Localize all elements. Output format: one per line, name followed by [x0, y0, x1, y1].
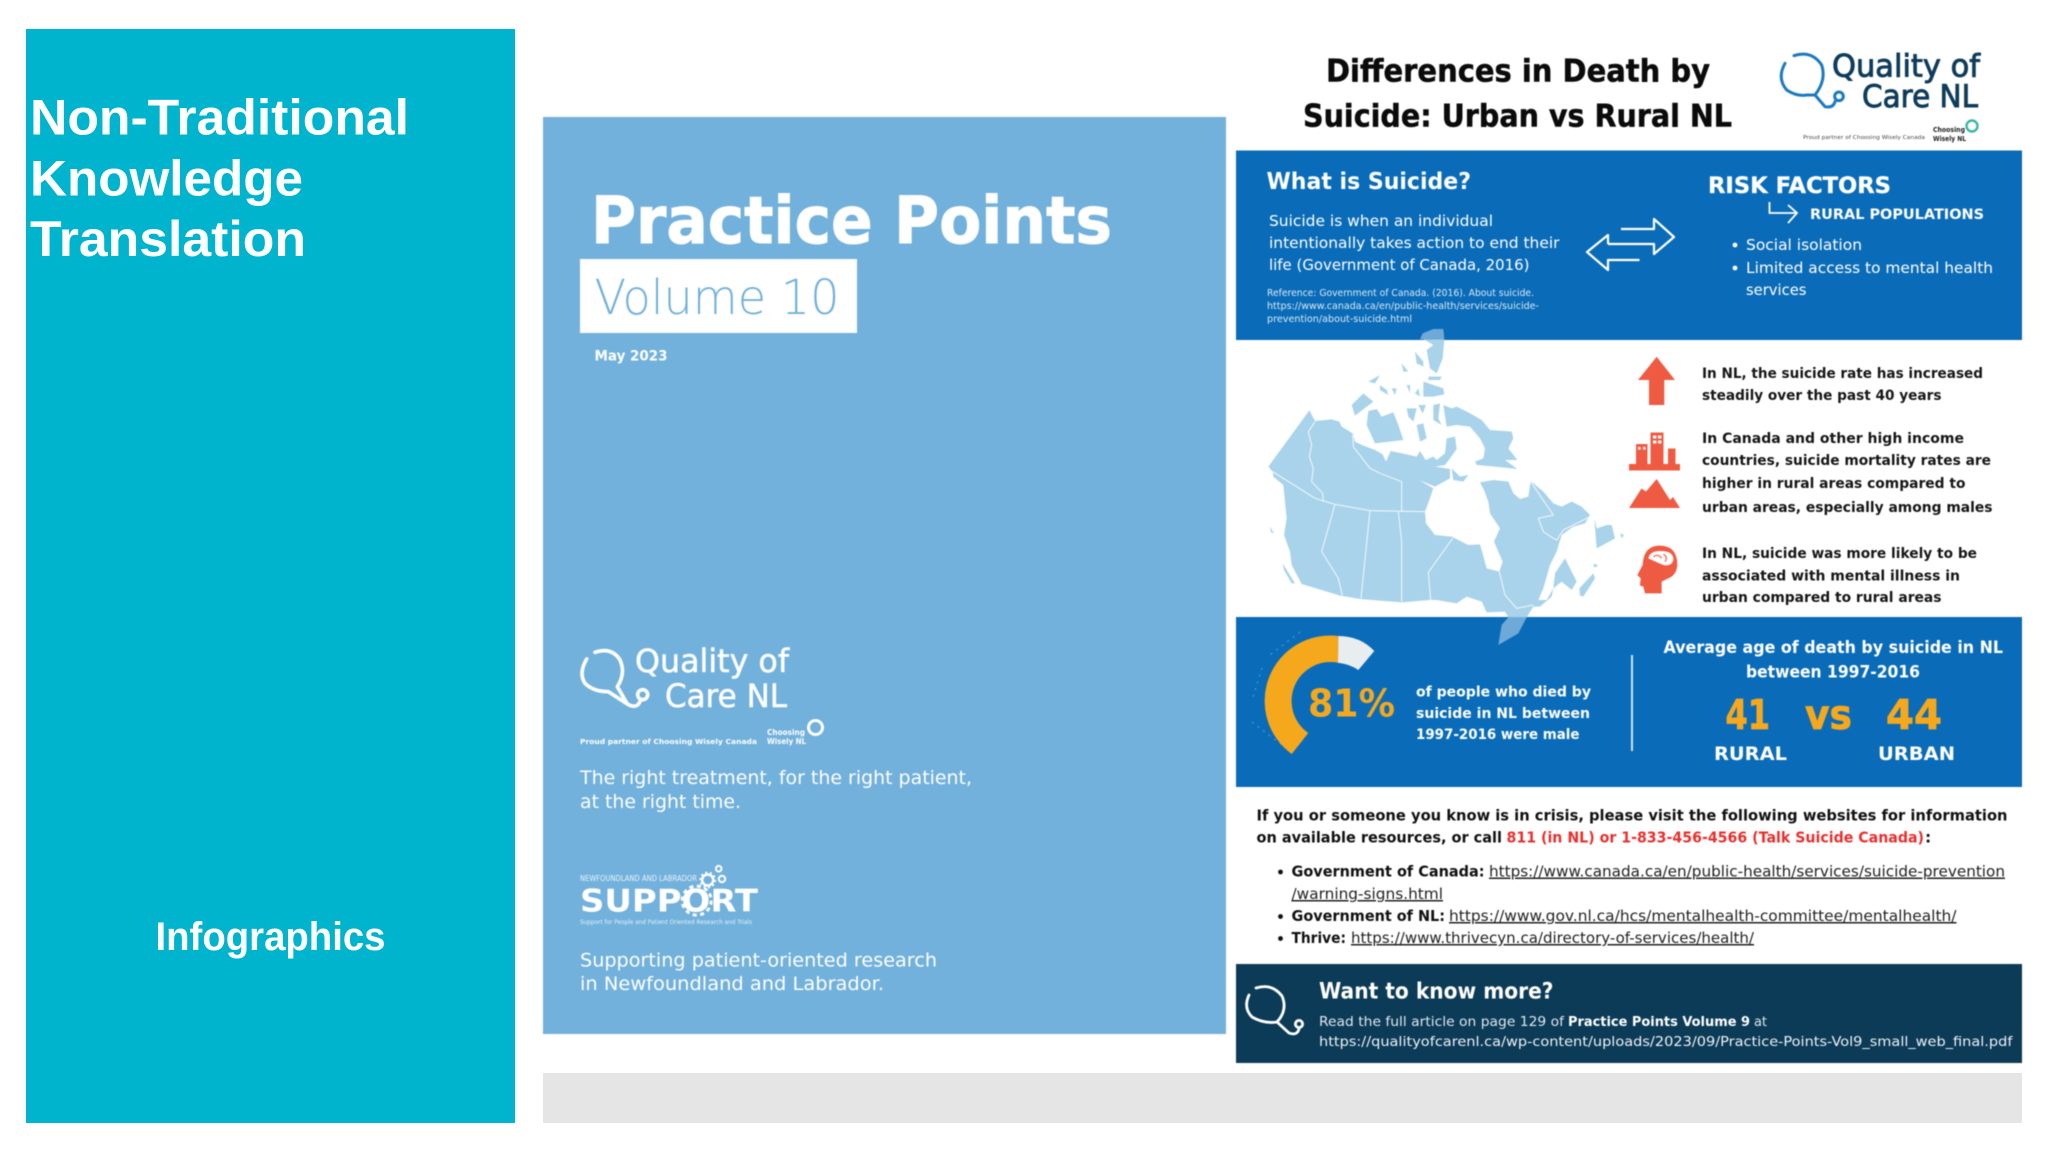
reference text: https://www.canada.ca/en/public-health/services/suicide-: [1267, 301, 1539, 312]
cover date: May 2023: [594, 348, 668, 364]
article reference: at: [1754, 1014, 1767, 1030]
heading: risk factors: RISK FACTORS: [1708, 174, 1891, 199]
sidebar label: Infographics: Infographics: [156, 915, 386, 959]
stat text: male share: [1416, 684, 1592, 743]
rural vs urban ages: [1714, 691, 1955, 765]
resource list: /warning-signs.html: [1292, 885, 1443, 903]
resource list: https://www.thrivecyn.ca/directory-of-services/health/: [1351, 929, 1755, 947]
infographic title: Suicide: Urban vs Rural NL: [1303, 98, 1732, 134]
rural vs urban ages: 44: [1886, 691, 1942, 739]
text: rate increased: In NL, the suicide rate has increased: [1702, 366, 1983, 382]
panel: Practice Points cover: [543, 117, 1226, 1034]
definition text: intentionally takes action to end their: [1269, 234, 1560, 252]
logo: NL SUPPORT: NEWFOUNDLAND AND LABRADOR: [580, 874, 697, 883]
panel: stats banner: [1236, 617, 2022, 787]
logo: Quality of Care NL white: [580, 642, 822, 746]
logo: Quality of Care NL white: Care NL: [665, 677, 787, 715]
article reference: Practice Points Volume 9: [1568, 1014, 1750, 1030]
crisis resources text: If you or someone you know is in crisis, please visit the following websites for information: [1256, 806, 2008, 824]
crisis resources text: 811 (in NL) or 1-833-456-4566 (Talk Suicide Canada): [1506, 828, 1924, 846]
stat text: male share: suicide in NL between: [1416, 706, 1590, 722]
tagline: right treatment: [579, 767, 972, 813]
stat text: male share: 1997-2016 were male: [1416, 727, 1580, 743]
article reference: https://qualityofcarenl.ca/wp-content/uploads/2023/09/Practice-Points-Vol9_small_web_final.pdf: [1319, 1034, 2014, 1050]
definition text: [1269, 212, 1560, 274]
text: mental illness: [1702, 546, 1977, 606]
logo: NL SUPPORT: Support for People and Patient Oriented Research and Trials: [580, 918, 753, 926]
logo: NL SUPPORT: SUPPORT: [580, 884, 758, 920]
text: rural mortality: countries, suicide mortality rates are: [1702, 453, 1991, 469]
resource list: Thrive:: [1292, 929, 1346, 947]
panel: section sidebar: [26, 29, 515, 1123]
logo: Quality of Care NL white: Quality of: [635, 642, 790, 680]
risk factor list: [1733, 236, 1993, 299]
heading: average age: Average age of death by suicide in NL: [1664, 638, 2003, 658]
reference text: prevention/about-suicide.html: [1267, 314, 1412, 325]
panel: suicide infographic: [1236, 30, 2022, 1063]
rural vs urban ages: 41: [1726, 691, 1770, 739]
icon: two-way arrows: [1587, 219, 1674, 270]
tagline: patient-oriented research: in Newfoundland and Labrador.: [580, 973, 884, 995]
panel: want to know more: [1236, 964, 2022, 1063]
crisis resources text: on available resources, or call: [1256, 828, 1502, 846]
donut chart: 81 percent: [1265, 635, 1395, 754]
logo: Quality of Care NL white: Proud partner of Choosing Wisely Canada: [580, 738, 757, 746]
resource list: https://www.gov.nl.ca/hcs/mentalhealth-committee/mentalhealth/: [1449, 907, 1957, 925]
resource list: Government of NL:: [1292, 907, 1445, 925]
infographic title: Differences in Death by: [1326, 54, 1710, 90]
rural vs urban ages: URBAN: [1878, 743, 1955, 765]
tagline: patient-oriented research: Supporting patient-oriented research: [580, 950, 937, 972]
donut chart: 81 percent: 81%: [1308, 682, 1395, 726]
definition text: Suicide is when an individual: [1269, 212, 1493, 230]
text: mental illness: In NL, suicide was more likely to be: [1702, 546, 1977, 562]
text: mental illness: urban compared to rural areas: [1702, 590, 1942, 606]
crisis resources text: :: [1925, 828, 1931, 846]
rural vs urban ages: RURAL: [1714, 743, 1787, 765]
rural vs urban ages: vs: [1805, 691, 1852, 739]
stat text: male share: of people who died by: [1416, 684, 1592, 700]
icon: up arrow: [1638, 357, 1675, 405]
subheading: rural populations: RURAL POPULATIONS: [1810, 207, 1984, 223]
logo: Quality of Care NL colour: Proud partner of Choosing Wisely Canada: [1803, 135, 1925, 141]
logo: Quality of Care NL colour: Choosing: [1933, 126, 1965, 134]
tagline: right treatment: The right treatment, for the right patient,: [579, 767, 972, 789]
text: rate increased: [1702, 366, 1983, 404]
heading: want to know more: Want to know more?: [1319, 980, 1554, 1004]
logo: Quality of Care NL colour: [1781, 48, 1981, 143]
volume badge: Volume 10: [594, 270, 840, 326]
sidebar title: Non-Traditional: [30, 90, 409, 146]
logo: Quality of Care NL white: Wisely NL: [767, 737, 806, 746]
resource list: Government of Canada:: [1292, 862, 1484, 880]
logo: Quality of Care NL colour: Wisely NL: [1933, 135, 1966, 143]
icon: stethoscope: [1247, 987, 1303, 1034]
text: rate increased: steadily over the past 40 years: [1702, 388, 1942, 404]
text: rural mortality: urban areas, especially among males: [1702, 500, 1992, 516]
text: mental illness: associated with mental illness in: [1702, 568, 1960, 584]
resource list: https://www.canada.ca/en/public-health/services/suicide-prevention: [1489, 862, 2005, 880]
icon: hook arrow: [1770, 202, 1797, 223]
tagline: patient-oriented research: [580, 950, 937, 995]
logo: NL SUPPORT: [580, 866, 758, 926]
map of Canada: [1268, 329, 1624, 645]
panel: what is suicide and risk factors: [1236, 150, 2022, 340]
icon: head with brain: [1637, 546, 1677, 593]
icon: city and mountain: [1629, 432, 1680, 508]
sidebar title: [30, 90, 409, 267]
grey footer bar: [543, 1073, 2022, 1123]
crisis resources text: [1256, 806, 2008, 947]
logo: Quality of Care NL colour: Quality of: [1832, 48, 1981, 84]
volume badge: [580, 259, 857, 333]
logo: Quality of Care NL colour: Care NL: [1862, 79, 1979, 115]
cover title: Practice Points: [591, 184, 1112, 259]
sidebar title: Knowledge: [30, 150, 303, 206]
logo: Quality of Care NL white: Choosing: [767, 728, 805, 737]
infographic title: [1303, 54, 1732, 134]
decorative gauge dots: [1252, 632, 1300, 745]
article reference: [1319, 1014, 2014, 1050]
heading: what is suicide: What is Suicide?: [1266, 169, 1471, 195]
text: rural mortality: In Canada and other high income: [1702, 431, 1964, 447]
reference text: [1267, 288, 1539, 325]
risk factor list: Limited access to mental health: [1746, 259, 1993, 277]
text: rural mortality: higher in rural areas compared to: [1702, 476, 1966, 492]
article reference: Read the full article on page 129 of: [1319, 1014, 1565, 1030]
heading: average age: between 1997-2016: [1746, 662, 1920, 682]
divider: [1631, 655, 1633, 751]
tagline: right treatment: at the right time.: [580, 791, 741, 813]
reference text: Reference: Government of Canada. (2016). About suicide.: [1267, 288, 1534, 299]
risk factor list: Social isolation: [1746, 236, 1862, 254]
definition text: life (Government of Canada, 2016): [1269, 256, 1530, 274]
sidebar title: Translation: [30, 211, 306, 267]
heading: average age: [1664, 638, 2003, 682]
resource list: [1278, 862, 2005, 947]
text: rural mortality: [1702, 431, 1992, 516]
risk factor list: services: [1746, 281, 1806, 299]
